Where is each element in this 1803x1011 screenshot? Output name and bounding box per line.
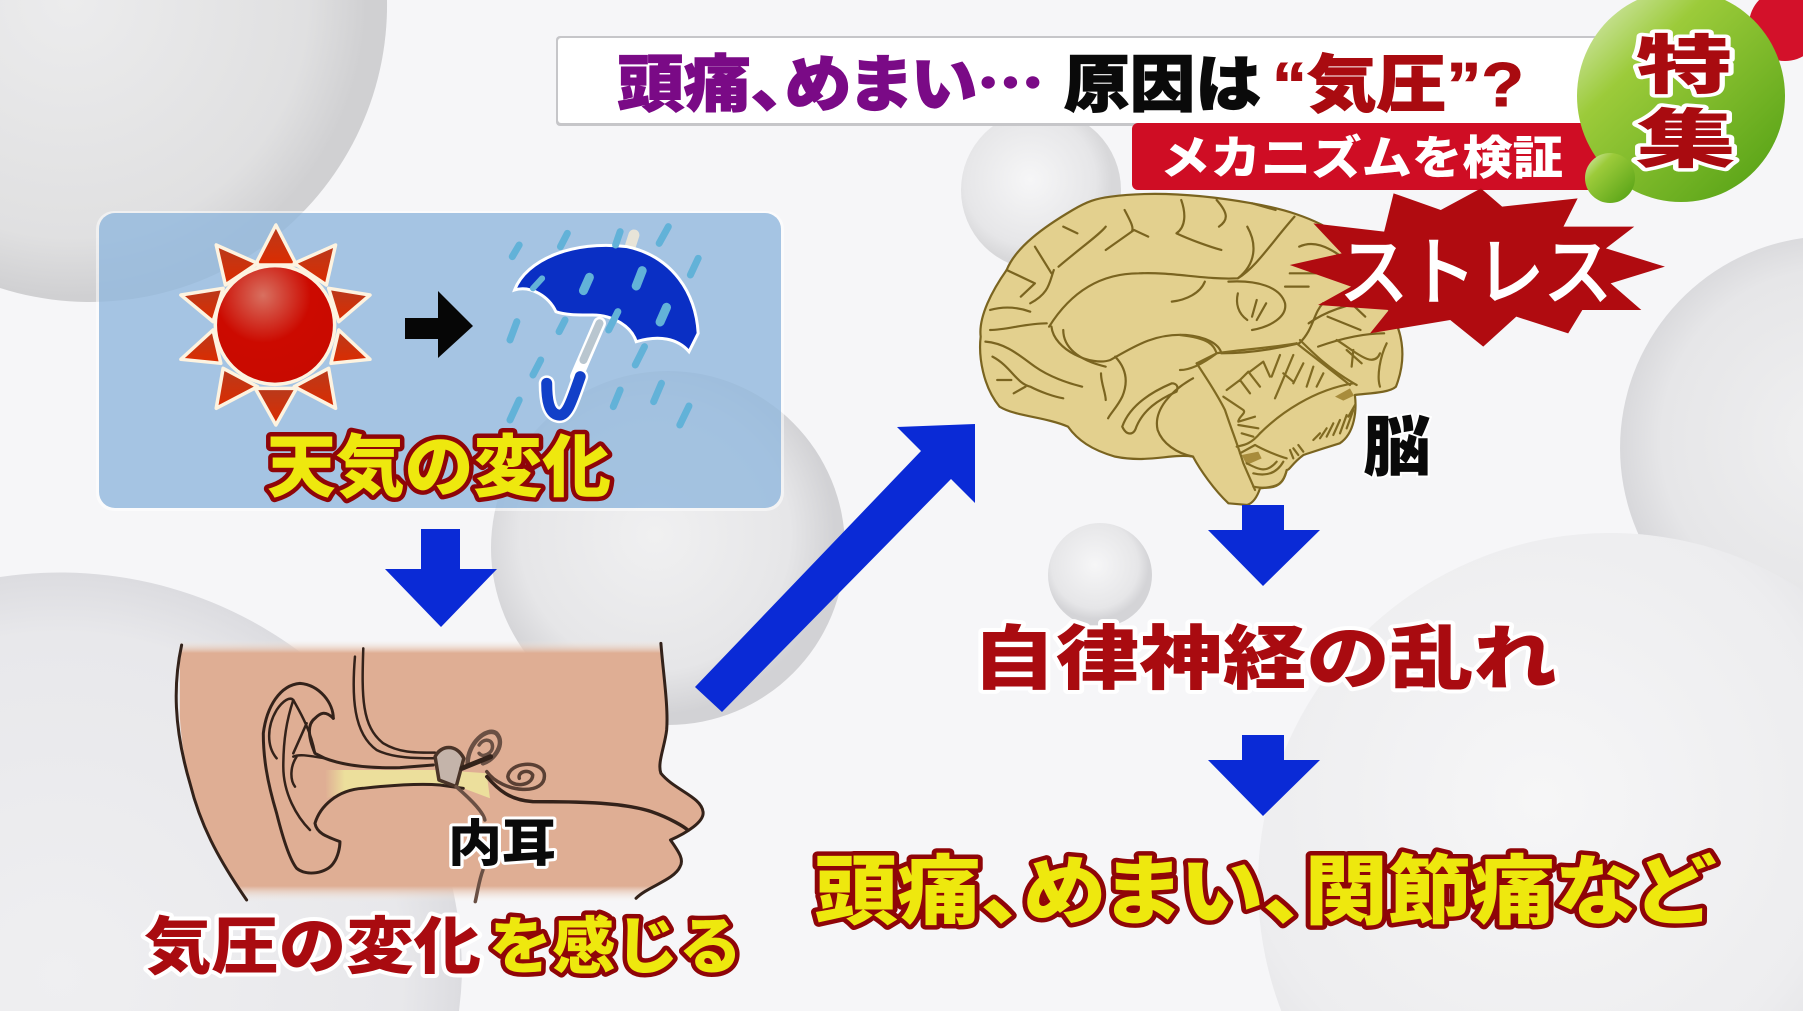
burst label: ストレス bbox=[1340, 231, 1612, 314]
label: inner ear: 内耳 bbox=[448, 816, 556, 872]
icon: brain bbox=[980, 194, 1402, 505]
sub-title banner: メカニズムを検証 bbox=[1160, 132, 1563, 184]
heading: symptoms: 頭痛、めまい、関節痛など bbox=[814, 850, 1717, 935]
head silhouette bbox=[180, 640, 703, 902]
title bar: “気圧”? bbox=[1272, 51, 1524, 120]
arrow: weather to ear bbox=[385, 529, 497, 627]
heading: feel air pressure change: を感じる bbox=[489, 913, 742, 982]
icon: sun bbox=[181, 225, 370, 425]
title bar bbox=[556, 34, 1620, 126]
panel: weather change bbox=[96, 211, 784, 511]
burst: stress bbox=[1290, 188, 1665, 347]
arrow: black bbox=[405, 291, 473, 358]
title bar: 頭痛、めまい … bbox=[617, 34, 1044, 124]
icon: umbrella in rain bbox=[510, 227, 698, 425]
badge: special feature: 特 bbox=[1636, 30, 1732, 102]
ear illustration bbox=[176, 640, 703, 902]
label: brain: 脳 bbox=[1363, 410, 1431, 484]
heading: feel air pressure change bbox=[144, 913, 742, 982]
inner ear bbox=[435, 732, 688, 902]
sub-title banner bbox=[1132, 123, 1612, 190]
title bar: 原因は bbox=[1064, 51, 1261, 120]
arrow: ear to brain bbox=[695, 424, 975, 712]
arrow: nerves to symptoms bbox=[1208, 735, 1320, 816]
outer ear and canal bbox=[176, 645, 490, 900]
nerve tube bbox=[354, 657, 435, 758]
heading: feel air pressure change: 気圧の変化 bbox=[144, 913, 481, 982]
badge: special feature bbox=[1577, 0, 1803, 203]
arrow: brain to autonomic nerves bbox=[1208, 505, 1320, 586]
right face outline bbox=[636, 643, 703, 898]
heading: weather change: 天気の変化 bbox=[267, 430, 611, 506]
badge: special feature: 集 bbox=[1636, 104, 1736, 176]
cerebellum and brain stem detail bbox=[1180, 335, 1387, 490]
heading: autonomic disorder: 自律神経の乱れ bbox=[972, 620, 1557, 698]
